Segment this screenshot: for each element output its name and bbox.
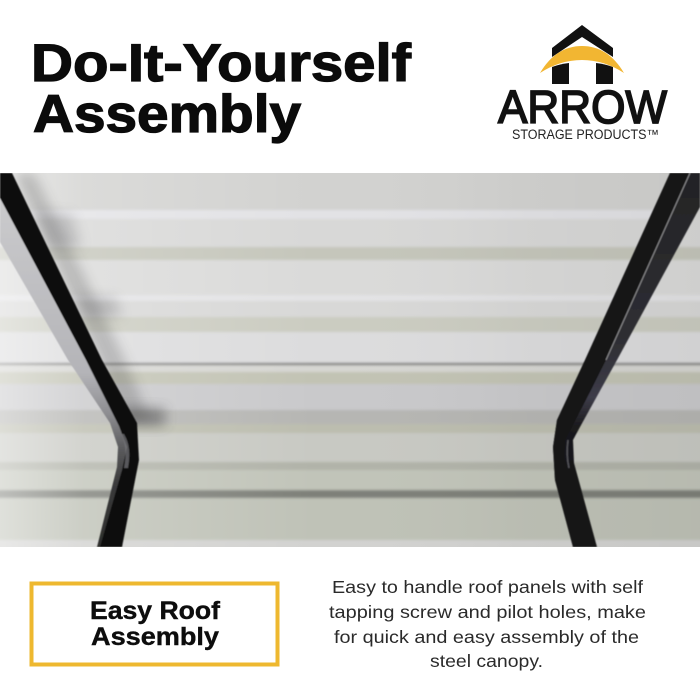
left steel beam [0,173,139,547]
logo wordmark: ARROW [498,81,668,133]
right steel beam [553,173,700,547]
description text: tapping screw and pilot holes, make [329,602,646,622]
title [31,34,411,144]
photo: steel canopy roof underside [0,165,700,555]
icon: house roof and walls [540,25,624,84]
roof panels [0,165,700,555]
description text: Easy to handle roof panels with self [332,577,643,597]
callout box: Easy Roof Assembly: Easy Roof [90,597,221,625]
callout box: Easy Roof Assembly [32,584,278,664]
callout box: Easy Roof Assembly: Assembly [91,623,219,651]
description text: steel canopy. [430,651,543,671]
title: Do-It-Yourself [31,34,411,93]
description text: for quick and easy assembly of the [334,627,639,647]
left beam shadow [14,173,165,426]
description text [329,577,646,671]
logo tagline: STORAGE PRODUCTS™ [512,127,659,142]
logo: Arrow Storage Products [498,25,668,142]
title: Assembly [33,85,302,144]
